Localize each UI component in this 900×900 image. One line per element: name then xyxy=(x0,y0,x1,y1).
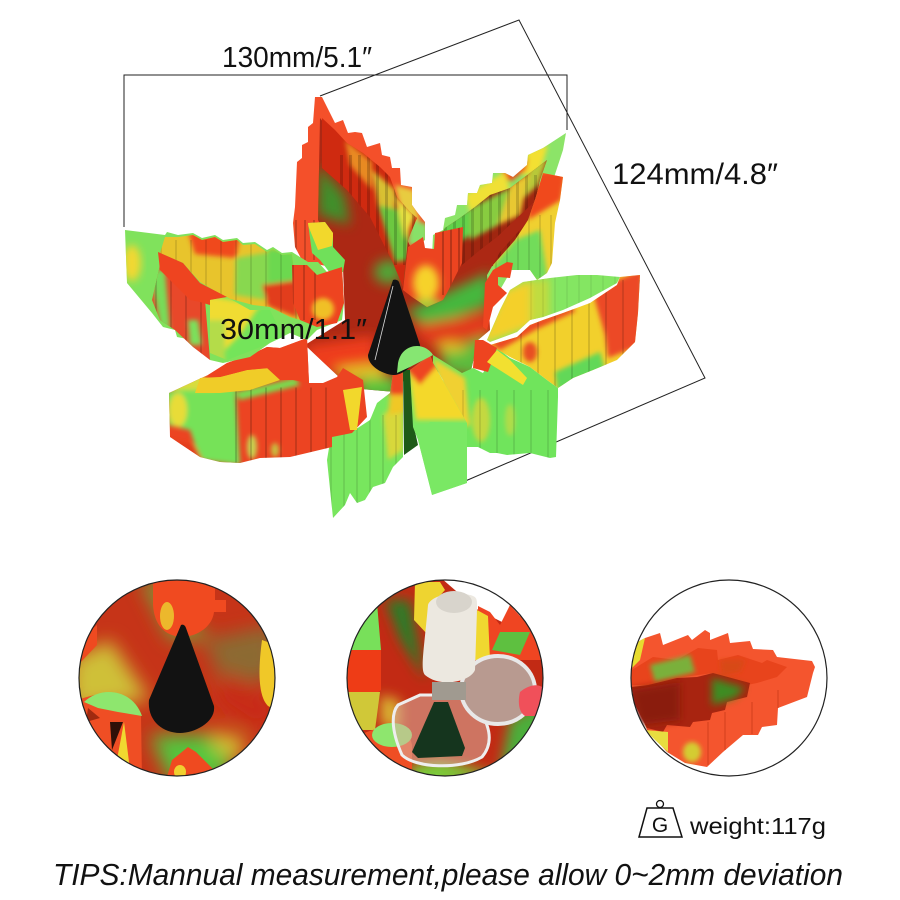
tips note: TIPS:Mannual measurement,please allow 0~2mm deviation xyxy=(53,857,843,892)
left leaf xyxy=(352,608,381,650)
cone seen through bowl xyxy=(412,702,465,758)
leaf interior wall xyxy=(632,648,787,685)
top right rim, inner side xyxy=(493,173,563,280)
wall: top right interior xyxy=(443,160,547,266)
main product: leaf ashtray xyxy=(120,90,645,525)
leaf: bottom xyxy=(327,372,403,518)
glass dish xyxy=(461,656,545,724)
leaf: right top face xyxy=(487,275,620,342)
wall: top leaf interior xyxy=(320,115,420,290)
interior wall xyxy=(160,235,300,320)
right leaf base xyxy=(260,640,274,707)
front wedge xyxy=(410,356,467,495)
yellow side edge xyxy=(630,638,645,670)
left leaf edge xyxy=(81,625,97,662)
black cone xyxy=(149,625,214,733)
leaf rim xyxy=(628,630,815,767)
background leaf teeth xyxy=(414,582,445,635)
side wall patch xyxy=(683,742,701,762)
dimension label: width: 130mm/5.1″ xyxy=(222,42,372,74)
centre lobe xyxy=(403,227,463,307)
U lobe xyxy=(292,265,344,327)
lower leaf tip xyxy=(168,747,212,776)
red rim xyxy=(208,338,309,383)
rim: lower right yellow xyxy=(487,350,527,385)
green dome and notch xyxy=(82,692,142,769)
leaf: top rim xyxy=(293,97,425,266)
leaf interior floor xyxy=(630,673,750,732)
interior yellow xyxy=(195,368,280,393)
black cone xyxy=(368,280,420,375)
icon: weight: G xyxy=(652,814,668,837)
white gap top right xyxy=(444,580,520,622)
dark slit xyxy=(403,370,418,455)
leaf: right red curve xyxy=(483,262,513,330)
detail circle: glass bowl xyxy=(345,578,545,790)
yellow lobe xyxy=(343,387,362,430)
upper leaf base xyxy=(153,580,226,637)
bottom left dome and notch xyxy=(364,730,412,770)
dimension label: depth: 124mm/4.8″ xyxy=(612,158,778,191)
green dome xyxy=(397,346,433,373)
yellow rim xyxy=(210,297,282,360)
dimension label: height: 30mm/1.1″ xyxy=(220,314,367,346)
red rim xyxy=(158,252,227,305)
wall teeth shading xyxy=(708,690,778,765)
frosted joint xyxy=(423,593,477,682)
lobe: lower right red xyxy=(473,340,497,372)
leaf: lower right xyxy=(433,349,558,458)
leaf: left xyxy=(120,225,350,365)
dimension lines xyxy=(124,20,705,482)
small yellow lobe xyxy=(308,222,345,272)
leaf: right front wall xyxy=(491,275,640,388)
glass neck xyxy=(432,682,466,700)
detail circle: leaf close-up xyxy=(628,580,827,776)
leaf: top right rim xyxy=(432,133,566,288)
detail circle: cone xyxy=(70,580,280,780)
floor xyxy=(307,118,536,392)
icon: weight xyxy=(639,800,682,837)
glass bowl xyxy=(393,695,489,766)
cone height arrow xyxy=(375,286,393,360)
front wall xyxy=(152,266,210,360)
leaf: lower left xyxy=(165,335,370,465)
weight label: weight:117g xyxy=(689,813,826,839)
